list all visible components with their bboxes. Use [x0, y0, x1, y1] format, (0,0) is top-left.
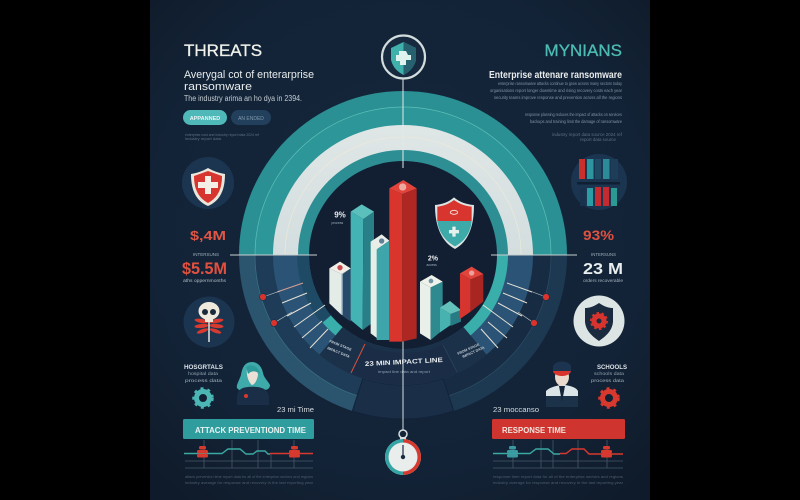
timeline curve: [184, 449, 313, 454]
label: hospitals: hospital data: [188, 371, 219, 376]
icon: bookshelf: [571, 154, 627, 210]
timeline notes: industry average for response and recovery in the last reporting year: [493, 481, 624, 485]
title: threats: THREATS: [184, 41, 262, 60]
stat: 23 M: 23 M: [583, 261, 623, 278]
panel: left stats: [182, 157, 270, 408]
bar: red right: [460, 267, 483, 319]
fine print: [185, 133, 259, 141]
body text: backups and training limit the damage of ransomware: [530, 119, 622, 124]
caption: INTERSUNS: [193, 252, 219, 257]
timeline curve: [493, 449, 623, 454]
button: attack prevention time: ATTACK PREVENTIOND TIME: [195, 426, 307, 435]
label: left time: 23 mi Time: [277, 407, 314, 414]
panel: attack prevention timeline: [183, 419, 314, 485]
small sector labels: FROM STAGE: [329, 339, 353, 352]
label: 9%: [332, 211, 346, 225]
bar: red tall: [389, 180, 417, 342]
label: schools: [591, 364, 628, 383]
body text: report data source: [580, 137, 616, 142]
dark inner disc: [309, 161, 497, 349]
panel: right stats: [546, 154, 628, 408]
icon: woman avatar: [237, 362, 270, 405]
caption: orders recoverable: [583, 278, 624, 283]
timeline grid: [185, 440, 313, 468]
label: hospitals: process data: [185, 378, 223, 383]
upper rings: [239, 91, 567, 254]
lower centre sector: [352, 379, 454, 419]
body text: industry report data source 2024 ref: [552, 132, 623, 137]
upper stem: [402, 78, 404, 168]
body text: [490, 81, 623, 142]
fine print: enterprise cost and industry report data 2024 ref: [185, 133, 259, 137]
panel: response timeline: [492, 419, 625, 485]
caption: aths oppernmonths: [183, 278, 227, 283]
label: 2%: access: [426, 263, 437, 267]
bar: teal tall: [351, 204, 374, 330]
icon: stopwatch: [385, 430, 421, 475]
background panel: [150, 0, 650, 500]
pill: teal: APPANNED: [190, 116, 220, 122]
stat: $,4M: $,4M: [190, 228, 226, 243]
label: schools: process data: [591, 378, 625, 383]
timeline notes: [493, 475, 624, 485]
timeline notes: [185, 475, 314, 485]
timeline notes: industry average for response and recovery in the last reporting year: [185, 481, 314, 485]
small sector labels: IMPACT DATA: [327, 346, 351, 359]
heading: average cost: [184, 69, 314, 93]
button: response time: RESPONSE TIME: [502, 426, 567, 435]
bar: white mid: [371, 234, 389, 340]
lower rings: [239, 256, 362, 411]
lower stem: [402, 340, 404, 430]
timeline notes: response time report data for all of the enterprise sectors and regions: [493, 475, 623, 479]
small sector labels: IMPACT DATA: [462, 345, 486, 359]
label: schools: schools data: [594, 371, 625, 376]
icon: top shield badge: [382, 36, 425, 78]
radial ticks: [277, 283, 532, 348]
impact panel: [351, 344, 457, 384]
bar chart: [329, 180, 483, 342]
label: 2%: [426, 256, 439, 267]
icon: skull: [184, 296, 234, 348]
label: 9%: process: [332, 221, 343, 225]
panel: left header: [183, 41, 314, 141]
panel: right header: [489, 41, 623, 142]
horizontal axis lines: [230, 254, 577, 256]
icon: red gear: [600, 388, 618, 408]
stat: 93%: 93%: [583, 227, 615, 243]
label: schools: SCHOOLS: [597, 364, 628, 371]
timeline markers: [197, 446, 300, 458]
body text: organisations report longer downtime and rising recovery costs each year: [490, 88, 622, 93]
small sector labels: [327, 339, 486, 359]
pill: dark: AN ENDED: [238, 116, 264, 122]
timeline grid: [493, 440, 623, 468]
label: hospitals: [184, 364, 224, 383]
bar: white short: [329, 262, 351, 322]
timeline notes: attack prevention time report data for all of the enterprise sectors and regions: [185, 475, 313, 479]
label: hospitals: HOSGRTALS: [184, 364, 224, 371]
heading: enterprise: Enterprise attenare ransomware: [489, 69, 622, 81]
bar: teal small: [440, 301, 461, 332]
caption: INTERSUNS: [591, 252, 616, 257]
icon: chart shield: [435, 197, 474, 249]
impact panel: 23 MIN IMPACT LINE: [365, 357, 444, 368]
body text: response planning reduces the impact of attacks on services: [525, 112, 623, 117]
timeline markers: [507, 446, 612, 458]
icon: officer avatar: [546, 362, 578, 407]
lower text sector: [319, 327, 487, 385]
icon: white shield badge: [574, 296, 624, 346]
central ring chart: [230, 78, 577, 430]
impact panel: impact line data and report: [378, 370, 430, 374]
heading: average cost: ransomware: [184, 81, 252, 93]
infographic canvas: [150, 0, 650, 500]
icon: red shield: [182, 157, 234, 209]
icon: teal gear: [194, 388, 212, 408]
stat: $5.5M: $5.5M: [182, 260, 227, 278]
label: right time: 23 moccanso: [493, 407, 539, 414]
heading: average cost: Averygal cot of enterarprise: [184, 69, 314, 81]
label: 9%: 9%: [334, 211, 346, 220]
label: 2%: 2%: [428, 256, 439, 263]
body text: security teams improve response and prevention across all the regions: [494, 95, 623, 100]
bar: white right: [420, 275, 443, 340]
title: mynians: MYNIANS: [545, 41, 622, 60]
small sector labels: FROM STAGE: [457, 342, 481, 356]
body text: enterprise ransomware attacks continue to grow across many sectors today: [498, 81, 623, 86]
red markers: [260, 291, 549, 326]
left inner ring shade: [297, 255, 331, 323]
subheading: The industry arima an ho dya in 2394.: [184, 94, 302, 103]
fine print: industry report data: [185, 137, 221, 141]
